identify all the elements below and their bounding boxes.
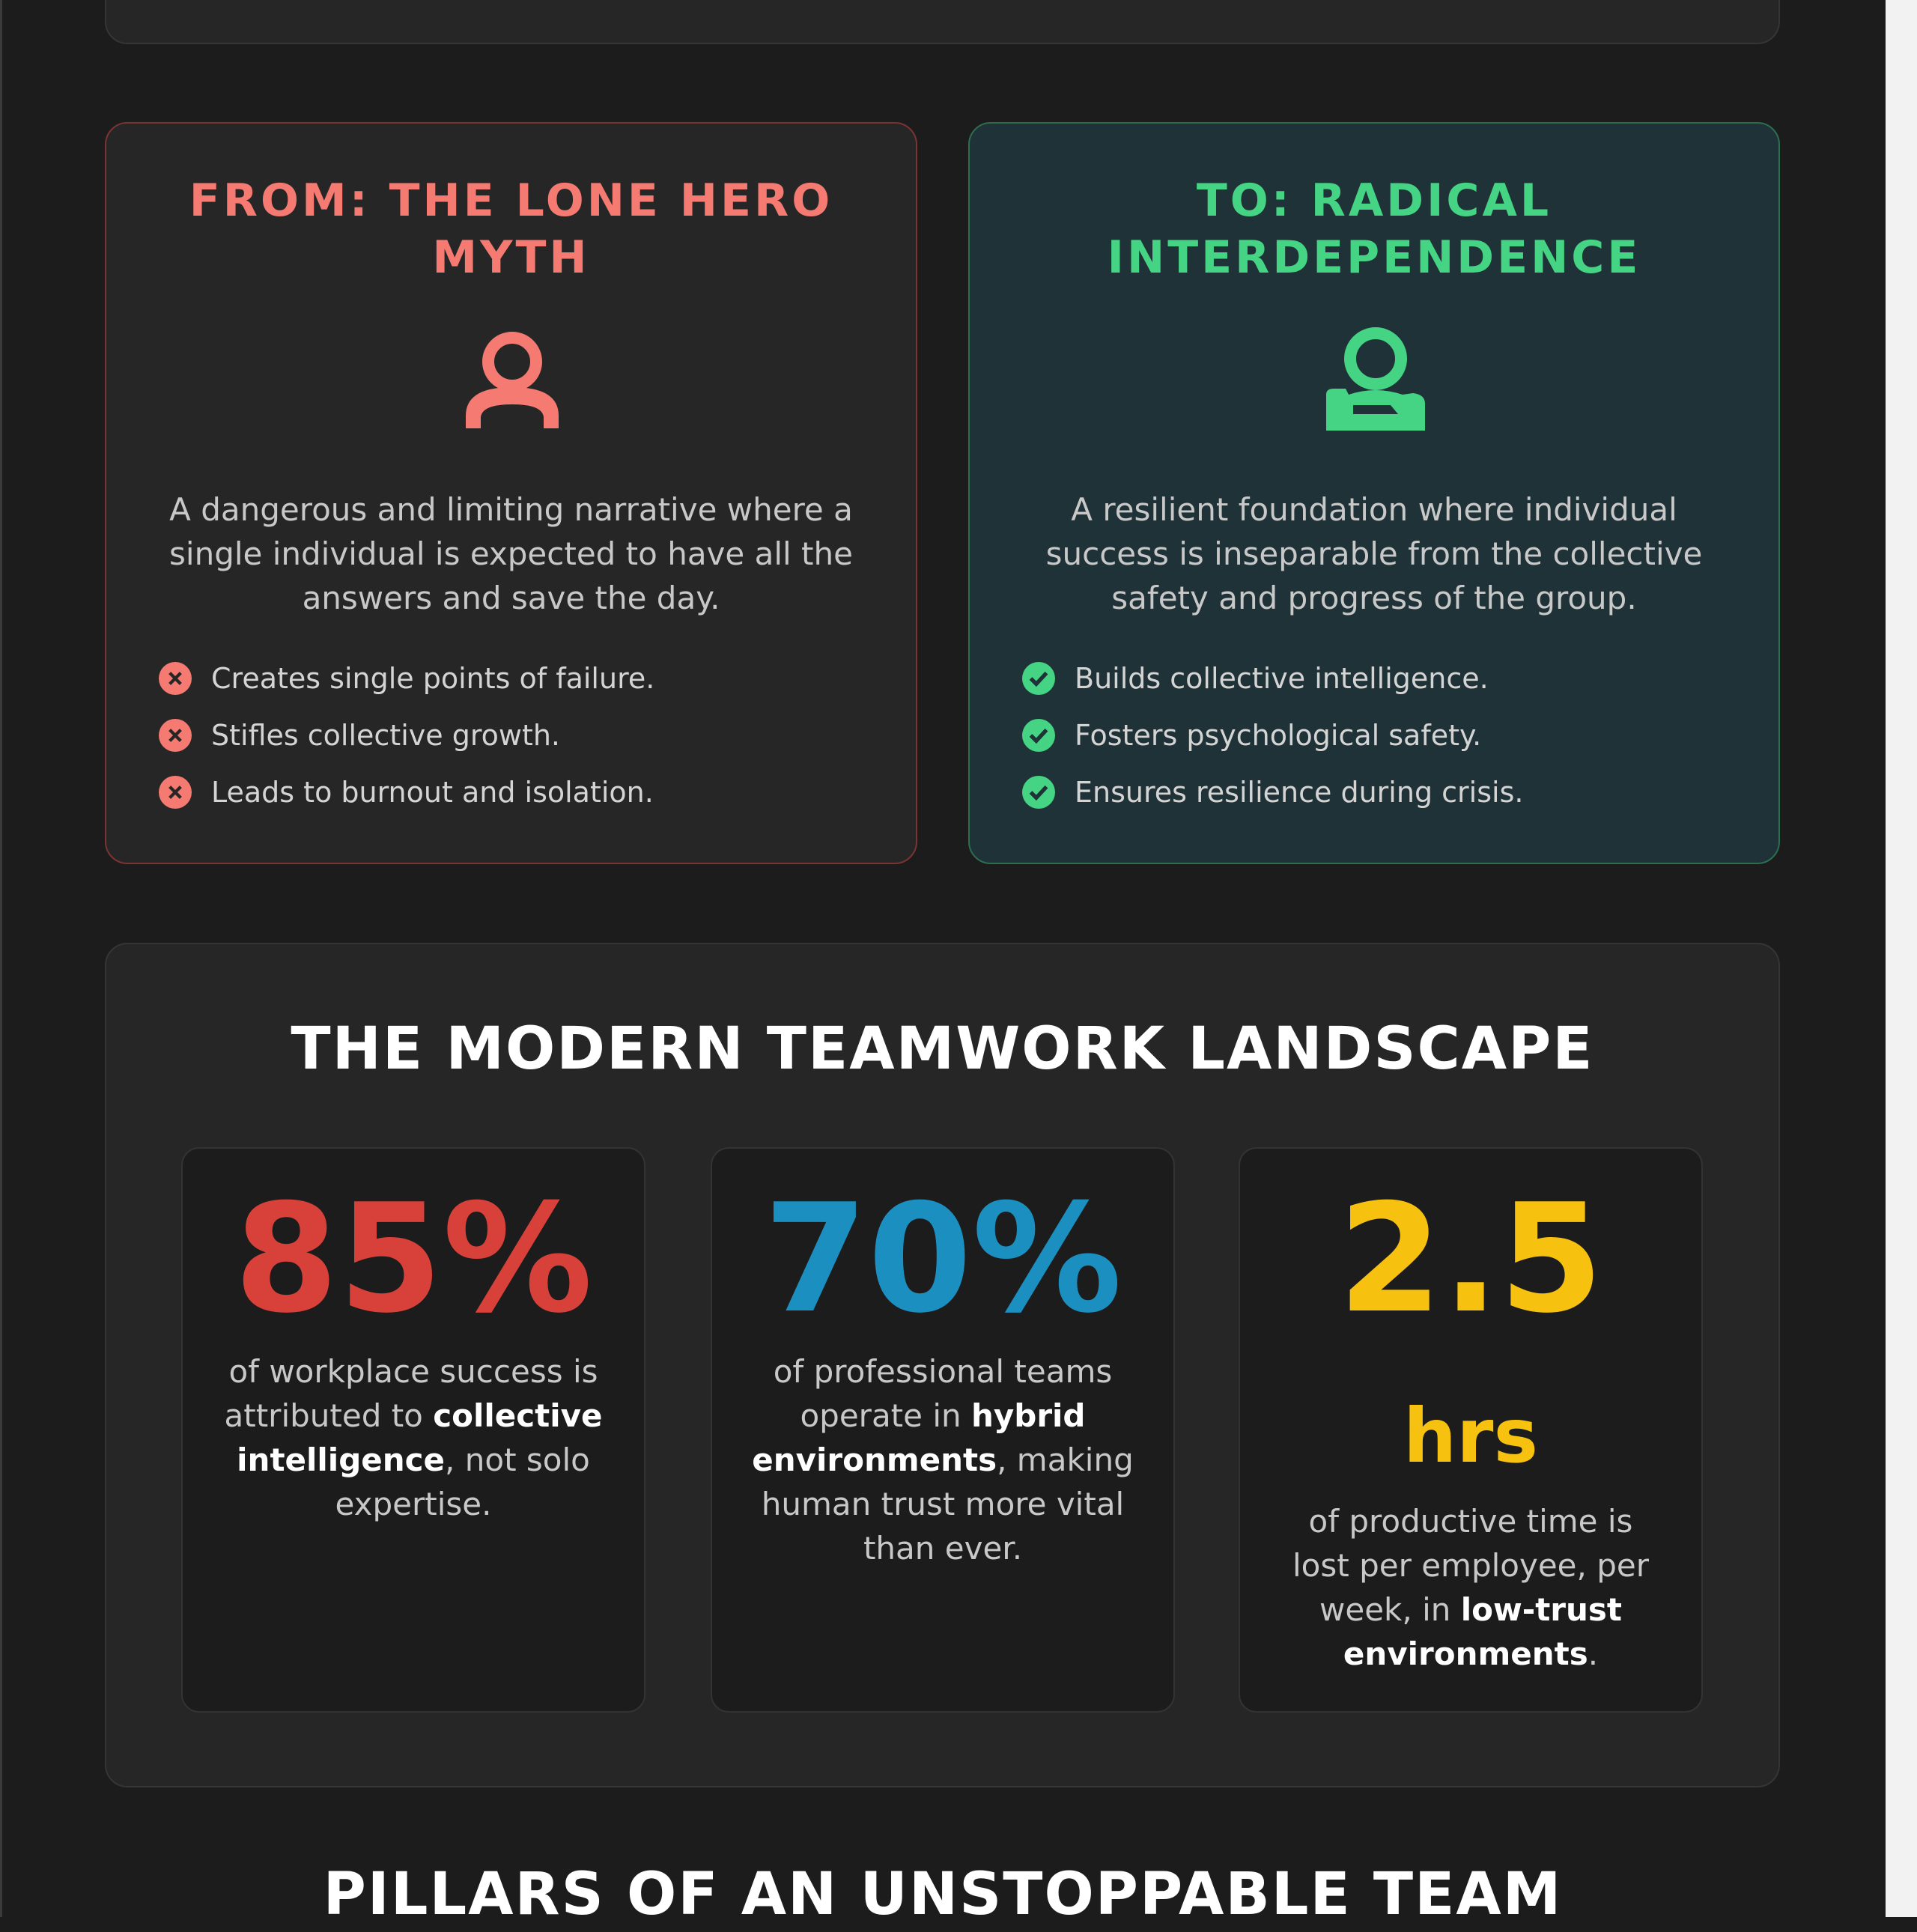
list: drawbacks: Leads to burnout and isolation.: [211, 776, 654, 809]
list: benefits: Fosters psychological safety.: [1075, 719, 1481, 752]
heading: radical interdependence: [1108, 174, 1641, 284]
heading: from lone hero: FROM: THE LONE HERO: [189, 174, 833, 227]
list: drawbacks: Creates single points of failure.: [211, 662, 654, 695]
heading: radical interdependence: INTERDEPENDENCE: [1108, 231, 1641, 284]
stat: 70%: [711, 1147, 1175, 1713]
list: benefits: Ensures resilience during crisis.: [1075, 776, 1523, 809]
description: A dangerous and limiting narrative where a single individual is expected to have all the answers and save the day.: [169, 491, 853, 616]
stat: 70%: of professional teams operate in hybrid environments, making human trust more vital than ever.: [752, 1353, 1134, 1567]
description: A resilient foundation where individual success is inseparable from the collective safety and progress of the group.: [1046, 491, 1702, 616]
list: drawbacks: Stifles collective growth.: [211, 719, 560, 752]
list: benefits: Builds collective intelligence.: [1075, 662, 1489, 695]
heading: radical interdependence: TO: RADICAL: [1197, 174, 1552, 227]
list: drawbacks: [159, 662, 654, 809]
card: to radical interdependence: [968, 122, 1780, 864]
card: from lone hero myth: [105, 122, 917, 864]
top panel (cut off): [105, 0, 1780, 44]
heading: landscape: THE MODERN TEAMWORK LANDSCAPE: [291, 1015, 1594, 1083]
heading: from lone hero: MYTH: [432, 231, 590, 284]
stat: 85%: of workplace success is attributed to collective intelligence, not solo expertise.: [225, 1353, 602, 1522]
stat: 70%: 70%: [764, 1172, 1122, 1346]
panel: modern teamwork landscape: [105, 943, 1780, 1787]
heading: pillars: PILLARS OF AN UNSTOPPABLE TEAM: [323, 1861, 1562, 1928]
stat: 85%: 85%: [234, 1172, 592, 1346]
heading: from lone hero: [189, 174, 833, 284]
stat: 2.5 hrs: [1239, 1147, 1703, 1713]
stat: 2.5 hrs: of productive time is lost per employee, per week, in low-trust environments.: [1292, 1503, 1649, 1672]
stat: 85%: [181, 1147, 645, 1713]
stat: 2.5 hrs: hrs: [1403, 1392, 1538, 1480]
icon: team user: [1326, 327, 1425, 431]
icon: single user: [466, 332, 559, 428]
stat: 2.5 hrs: 2.5: [1338, 1172, 1603, 1346]
list: benefits: [1022, 662, 1523, 809]
